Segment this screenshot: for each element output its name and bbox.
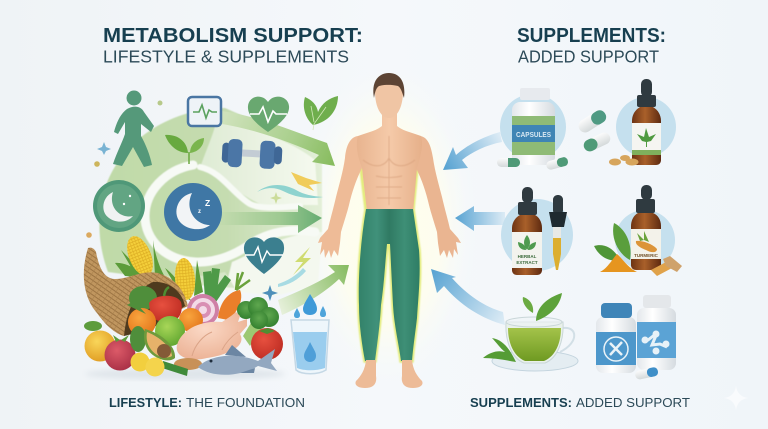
bottom caption: lifestyle: LIFESTYLE: <box>109 395 182 410</box>
corn cobs and leaves <box>115 232 203 302</box>
cornucopia opening <box>124 282 185 336</box>
title: supplements heading: SUPPLEMENTS: <box>517 25 666 47</box>
supplement: herbal extract bottle and dropper: EXTRACT <box>516 260 538 265</box>
broccoli <box>237 297 279 346</box>
green lifestyle swoosh background <box>99 108 322 296</box>
body glow outline <box>359 168 420 361</box>
left arm and hand <box>318 136 362 258</box>
supplement: blue bottles <box>596 295 676 380</box>
cornucopia basket <box>84 248 188 336</box>
arrow: green middle <box>215 205 322 233</box>
title: supplements heading: ADDED SUPPORT <box>518 46 659 66</box>
apples and lemons <box>84 330 116 362</box>
supplement: capsules bottle <box>500 88 566 165</box>
supplement: turmeric bottle <box>594 185 682 276</box>
fish <box>198 349 277 375</box>
icon: monitor with pulse <box>188 97 221 126</box>
green beans <box>203 268 231 302</box>
leggings <box>359 209 420 361</box>
icon: teal heart with pulse <box>244 237 284 274</box>
icon: water glass with droplets <box>291 294 329 374</box>
arrow: blue top <box>443 132 502 170</box>
bottom caption: lifestyle <box>109 395 305 410</box>
bottom caption: supplements: SUPPLEMENTS: <box>470 395 572 410</box>
icon: blue moon sleep badge: Z <box>205 198 210 208</box>
arrow: green lower <box>278 265 349 315</box>
title: supplements heading <box>517 25 666 66</box>
title: lifestyle heading: LIFESTYLE & SUPPLEMENTS <box>103 46 349 66</box>
arrow: blue lower <box>431 269 505 325</box>
bottom caption: supplements <box>470 395 690 410</box>
icon: green moon badge <box>93 180 145 232</box>
central human figure <box>318 73 461 388</box>
icon: lower spark and wave <box>262 247 311 301</box>
icon: dumbbell <box>221 138 283 170</box>
food group: cornucopia with vegetables <box>84 232 285 380</box>
supplement: herbal extract bottle and dropper: HERBAL <box>518 254 537 259</box>
peppers and citrus <box>149 296 182 322</box>
title: lifestyle heading <box>103 25 363 66</box>
icon: decorative dots <box>86 100 162 238</box>
icon: energy wave and spark <box>257 172 323 204</box>
arrow: blue middle <box>455 206 505 231</box>
icon: blue moon sleep badge: z <box>198 209 201 215</box>
supplement: capsules bottle: CAPSULES <box>516 130 551 139</box>
icon: green heart with pulse <box>248 97 289 132</box>
supplement: leaf tincture bottle <box>609 79 676 166</box>
icon: sprout <box>165 135 204 164</box>
supplement: turmeric bottle: TURMERIC <box>634 253 659 258</box>
bottom caption: lifestyle: THE FOUNDATION <box>186 395 305 410</box>
neck and torso <box>357 112 422 212</box>
avocado and cucumber <box>130 326 146 352</box>
arrow: green top <box>222 111 335 166</box>
hair <box>373 73 404 98</box>
feet <box>355 360 376 388</box>
bottom caption: supplements: ADDED SUPPORT <box>576 395 690 410</box>
supplement: green tea cup <box>483 293 578 371</box>
icon: watermark sparkle <box>724 386 748 410</box>
supplement: herbal extract bottle and dropper <box>501 187 573 275</box>
title: lifestyle heading: METABOLISM SUPPORT: <box>103 25 363 47</box>
head <box>375 80 403 118</box>
carrot <box>218 290 241 320</box>
chicken <box>177 312 247 359</box>
icon: walking person <box>113 90 154 167</box>
right arm and hand <box>416 136 461 258</box>
supplement: loose capsules <box>497 108 612 171</box>
muscle definition <box>363 136 415 205</box>
icon: blue moon sleep badge <box>164 183 222 241</box>
icon: leaf top <box>304 96 338 130</box>
